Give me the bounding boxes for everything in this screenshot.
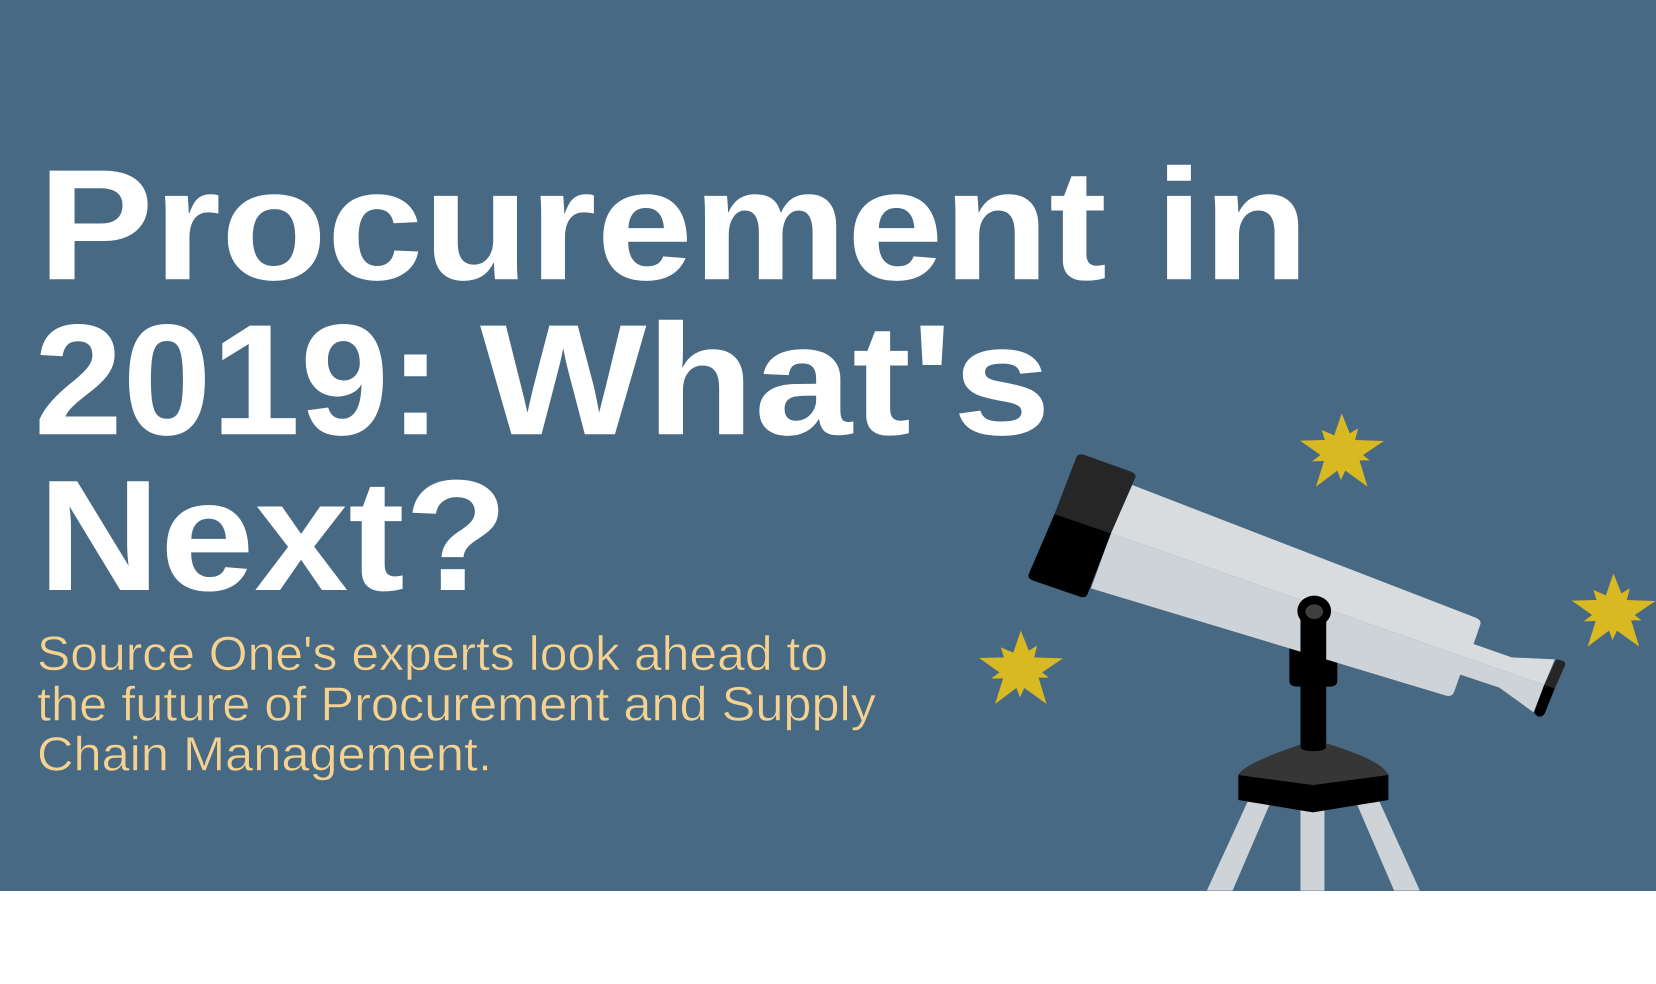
title: Next? bbox=[38, 448, 508, 624]
subtitle text block bbox=[37, 628, 876, 782]
subtitle text block: Chain Management. bbox=[37, 729, 492, 782]
icon: star right bbox=[1572, 573, 1656, 647]
telescope eyepiece cap bbox=[1534, 659, 1565, 717]
telescope front cap bbox=[1028, 454, 1136, 597]
tripod head bbox=[1238, 743, 1388, 812]
telescope post and pivot bbox=[1297, 596, 1331, 751]
tripod legs bbox=[1207, 802, 1420, 891]
illustration: telescope and stars bbox=[979, 413, 1656, 891]
icon: star left bbox=[979, 631, 1063, 704]
mount clamp bbox=[1289, 648, 1337, 687]
title: Procurement in bbox=[38, 137, 1309, 313]
title: What's bbox=[480, 292, 1051, 468]
icon: star top bbox=[1300, 413, 1384, 487]
title bbox=[34, 137, 1309, 624]
subtitle text block: Source One's experts look ahead to bbox=[37, 628, 828, 681]
subtitle text block: the future of Procurement and Supply bbox=[37, 678, 876, 732]
title: 2019: bbox=[34, 292, 442, 468]
telescope tube bbox=[1091, 485, 1555, 712]
